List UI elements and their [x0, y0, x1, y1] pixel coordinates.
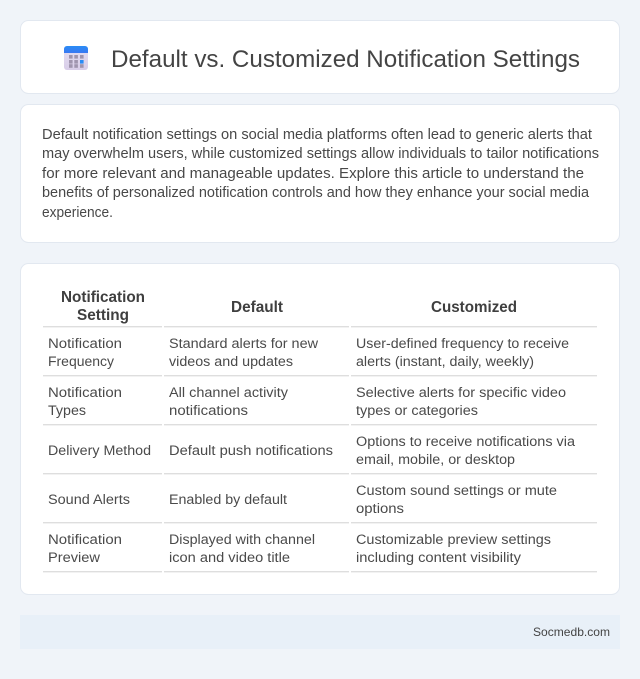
row: notification types: Selective alerts for specific video	[356, 385, 566, 401]
intro text: experience.	[42, 205, 113, 221]
icon: calendar	[64, 46, 88, 70]
row: notification frequency: User-defined frequency to receive	[356, 336, 569, 352]
table panel	[20, 264, 620, 594]
header panel	[20, 20, 620, 94]
row: notification frequency: videos and updates	[169, 354, 293, 370]
table header row	[61, 289, 517, 324]
row: notification types: notifications	[169, 403, 248, 419]
row: sound alerts: Sound Alerts	[48, 492, 130, 508]
intro text: for more relevant and manageable updates. Explore this article to understand the	[42, 166, 584, 182]
row: notification preview: Notification	[48, 532, 122, 548]
row: sound alerts: Custom sound settings or mute	[356, 483, 557, 499]
intro text: benefits of personalized notification controls and how they enhance your social media	[42, 185, 590, 201]
row: notification types: types or categories	[356, 403, 478, 419]
footer bar	[20, 615, 620, 649]
table header row: Notification	[61, 289, 145, 306]
row: delivery method: Options to receive notifications via	[356, 434, 575, 450]
table header row: Setting	[77, 307, 129, 324]
row: notification preview: Preview	[48, 550, 101, 566]
row: notification types	[48, 385, 566, 419]
row: notification types: Types	[48, 403, 86, 419]
table header row: Customized	[431, 299, 517, 316]
row: sound alerts	[48, 483, 557, 517]
row: notification preview: icon and video title	[169, 550, 290, 566]
intro panel	[20, 104, 620, 242]
row: sound alerts: options	[356, 501, 404, 517]
row: notification preview: Customizable preview settings	[356, 532, 551, 548]
row: delivery method: Delivery Method	[48, 443, 151, 459]
row: delivery method: email, mobile, or desktop	[356, 452, 515, 468]
row: delivery method	[48, 434, 575, 468]
footer source text: Socmedb.com	[533, 625, 610, 639]
row: notification frequency: Standard alerts for new	[169, 336, 319, 352]
row: notification preview: including content visibility	[356, 550, 522, 566]
row: delivery method: Default push notifications	[169, 443, 333, 459]
row: notification frequency: Frequency	[48, 354, 115, 370]
row: notification frequency	[48, 336, 569, 370]
row: notification frequency: alerts (instant, daily, weekly)	[356, 354, 534, 370]
row: notification preview: Displayed with channel	[169, 532, 315, 548]
row: notification types: Notification	[48, 385, 122, 401]
intro text: Default notification settings on social media platforms often lead to generic alerts that	[42, 127, 592, 143]
row: notification preview	[48, 532, 551, 566]
intro text: may overwhelm users, while customized settings allow individuals to tailor notifications	[42, 146, 599, 162]
row: sound alerts: Enabled by default	[169, 492, 287, 508]
intro text	[42, 127, 599, 221]
title: Default vs. Customized Notification Settings	[111, 46, 580, 73]
row: notification types: All channel activity	[169, 385, 289, 401]
row: notification frequency: Notification	[48, 336, 122, 352]
table header row: Default	[231, 299, 284, 316]
